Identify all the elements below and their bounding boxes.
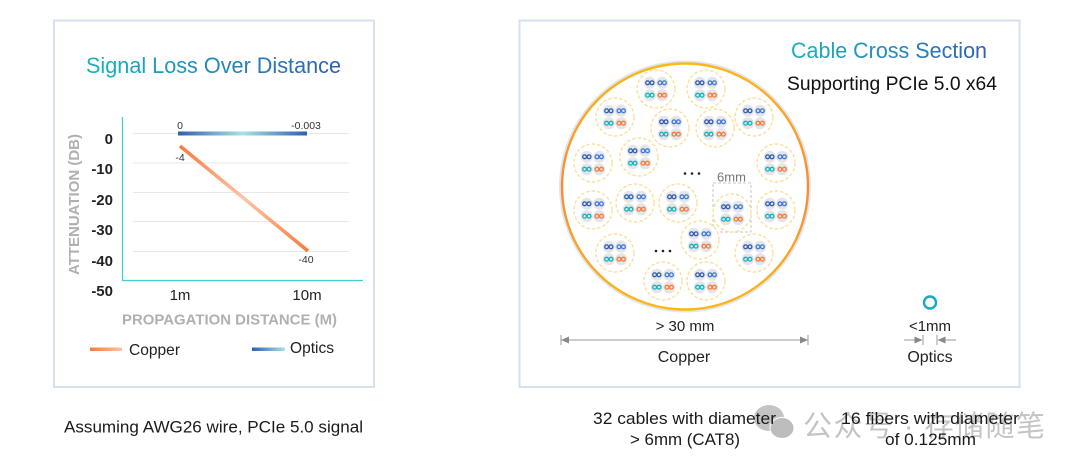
data labels: 0 xyxy=(177,120,183,132)
data labels: -40 xyxy=(298,254,314,266)
legend: Copper xyxy=(129,342,181,359)
optics fiber circle xyxy=(924,296,936,308)
watermark: 公众号 · 存储随笔 xyxy=(803,410,1045,443)
x axis tick labels xyxy=(170,287,322,304)
optics dimension: Optics xyxy=(907,349,953,366)
heading: cable cross section: Cable Cross Section xyxy=(791,38,987,63)
optics line xyxy=(178,132,307,136)
copper dimension: > 30 mm xyxy=(656,318,714,335)
y axis tick labels: 0 xyxy=(105,131,113,148)
panel: cable cross section xyxy=(520,20,1020,387)
y axis tick labels: -10 xyxy=(91,161,113,178)
copper line xyxy=(180,146,308,251)
x axis tick labels: 10m xyxy=(292,287,322,304)
heading: signal loss: Signal Loss Over Distance xyxy=(86,53,341,78)
ellipsis dots xyxy=(655,172,700,252)
data labels xyxy=(175,120,321,266)
y axis tick labels: -50 xyxy=(91,283,113,300)
y axis title: ATTENUATION (DB) xyxy=(66,134,83,275)
x axis tick labels: 1m xyxy=(170,287,190,304)
y axis tick labels: -30 xyxy=(91,222,113,239)
legend xyxy=(90,340,334,359)
copper dimension xyxy=(561,318,808,366)
y axis tick labels xyxy=(91,131,113,300)
caption: fibers: of 0.125mm xyxy=(885,430,976,449)
6mm label: 6mm xyxy=(717,170,746,184)
caption: copper cables xyxy=(593,409,776,449)
cable bundles xyxy=(574,70,795,300)
copper dimension: Copper xyxy=(658,349,711,366)
x axis title: PROPAGATION DISTANCE (M) xyxy=(122,312,337,328)
y axis tick labels: -40 xyxy=(91,253,113,270)
caption: copper cables: 32 cables with diameter xyxy=(593,409,776,428)
caption: fibers xyxy=(841,409,1019,449)
caption: assumptions: Assuming AWG26 wire, PCIe 5.0 signal xyxy=(64,418,363,436)
6mm scale box xyxy=(713,183,751,232)
optics dimension xyxy=(904,318,956,366)
legend: Optics xyxy=(290,340,334,357)
data labels: -4 xyxy=(175,152,185,164)
y axis tick labels: -20 xyxy=(91,192,113,209)
subheading: Supporting PCIe 5.0 x64 xyxy=(787,74,997,95)
panel: signal loss over distance xyxy=(54,20,374,387)
line chart: attenuation vs distance xyxy=(66,117,363,328)
data labels: -0.003 xyxy=(291,120,321,132)
copper cable cross section xyxy=(561,62,809,310)
caption: copper cables: > 6mm (CAT8) xyxy=(630,430,740,449)
optics dimension: <1mm xyxy=(909,318,951,335)
caption: fibers: 16 fibers with diameter xyxy=(841,409,1019,428)
